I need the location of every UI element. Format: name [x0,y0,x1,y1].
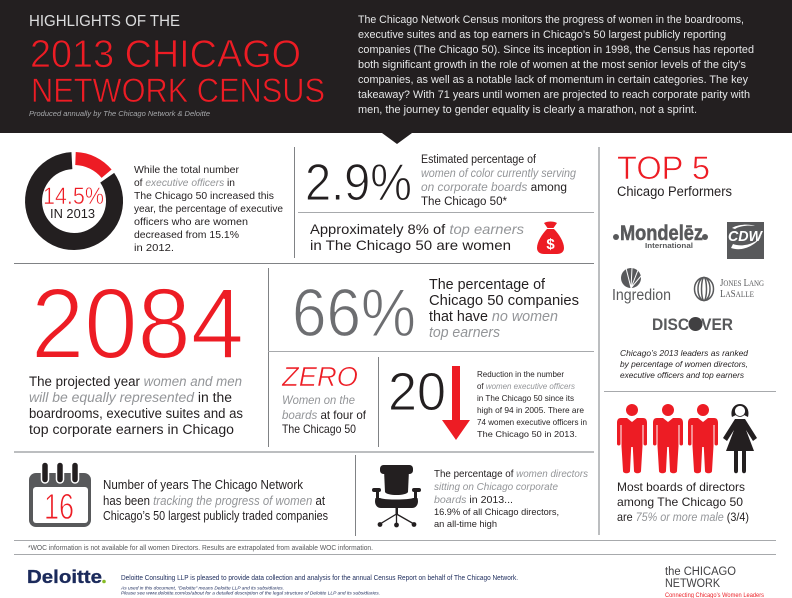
panel: 2.9 percent women of color [305,154,577,212]
title: Produced annually by The Chicago Network & Deloitte [29,109,210,118]
text block: While the total number [134,164,239,176]
logo: Deloitte: Deloitte [27,566,102,587]
logo: Jones Lang LaSalle: JONES LANG [720,278,764,289]
panel: 2.9 percent women of color: on corporate boards among [421,182,567,194]
panel: zero women on boards [281,361,367,436]
caption: Chicago’s 2013 leaders as ranked [620,348,748,358]
text block: of executive officers in [134,177,235,189]
panel: reduction of 20 [388,362,587,440]
panel: top earners: Approximately 8% of top earners [310,221,524,237]
panel: top earners [310,221,564,254]
panel: zero women on boards: The Chicago 50 [282,422,356,436]
intro paragraph: both significant growth in the role of women at the most senior levels of the city’s [358,59,746,71]
intro paragraph: companies, as well as a notable lack of momentum in certain categories. The key [358,74,748,86]
panel: 2084: 2084 [31,268,244,380]
panel: 66 percent: top earners [429,324,500,341]
panel: zero women on boards: ZERO [281,361,358,392]
panel: 66 percent: that have no women [429,308,558,325]
logo: The Chicago Network [665,566,764,598]
panel: reduction of 20: The Chicago 50 in 2013. [477,429,577,439]
intro paragraph [358,14,754,116]
donut chart [34,158,115,242]
panel: top 5 performers [612,150,764,380]
panel: 66 percent: Chicago 50 companies [429,292,579,309]
panel: reduction of 20: of women executive officers [477,381,576,391]
panel: women directors: an all-time high [434,519,497,530]
panel: executive officers donut [34,158,283,254]
panel: years tracking: Number of years The Chicago Network [103,478,304,492]
text block: year, the percentage of executive [134,203,283,215]
panel: zero women on boards: boards at four of [282,408,367,422]
panel: 2.9 percent women of color: 2.9% [305,154,412,212]
title: NETWORK CENSUS [31,72,325,110]
panel: reduction of 20: in The Chicago 50 since its [477,393,574,403]
icon: three men, one woman [617,404,757,473]
panel: reduction of 20: high of 94 in 2005. There are [477,405,584,415]
panel: reduction of 20: 20 [388,362,446,422]
panel: 2.9 percent women of color: women of color currently serving [421,168,577,180]
panel: boards male ratio: Most boards of directors [617,480,745,494]
panel: top earners: in The Chicago 50 are women [310,237,511,253]
panel: 2084: boardrooms, executive suites and as [29,406,243,421]
panel: years tracking: Chicago’s 50 largest publicly traded companies [103,509,328,523]
icon: office chair [372,465,421,527]
arrow: down [442,366,470,440]
text block: The Chicago 50 increased this [134,190,274,202]
intro paragraph: companies (The Chicago 50). Since its inception in 1998, the Census has reported [358,44,754,56]
footer: Deloitte: As used in this document, "Deloitte" means Deloitte LLP and its subsidiaries. [120,586,284,590]
title: 2013 CHICAGO [30,33,301,76]
intro paragraph: The Chicago Network Census monitors the progress of women in the boardrooms, [358,14,744,26]
panel: reduction of 20: Reduction in the number [477,369,564,379]
panel: reduction of 20: 74 women executive officers in [477,417,587,427]
icon: calendar [29,462,91,527]
intro paragraph: men, the journey to gender equality is clearly a marathon, not a sprint. [358,104,697,116]
logo: Jones Lang LaSalle: LASALLE [720,289,754,300]
panel: 2084: top corporate earners in Chicago [29,422,234,437]
logo: Mondelez: International [645,241,693,250]
panel: women directors: sitting on Chicago corporate [434,482,558,493]
panel: 2.9 percent women of color: Estimated percentage of [421,154,537,166]
logo: CDW: CDW [728,228,764,245]
logo: Discover: DISCOVER [652,316,733,334]
panel: zero women on boards: Women on the [282,393,355,407]
intro paragraph: takeaway? With 71 years until women are projected to reach corporate parity with [358,89,750,101]
logo: Ingredion: Ingredion [612,287,671,304]
panel: women directors [372,465,588,530]
panel: years tracking [29,462,328,527]
icon: money bag: $ [546,236,555,253]
footer: Deloitte: Deloitte Consulting LLP is pleased to provide data collection and analysis for the annual Census Report on behalf of The Chicago Network. [121,575,518,582]
footer: Deloitte [27,566,518,596]
panel: boards male ratio: among The Chicago 50 [617,495,743,509]
icon: calendar: 16 [44,486,74,527]
logo: Mondelez: Mondelēz [620,222,703,245]
panel: women directors: 16.9% of all Chicago directors, [434,507,559,518]
panel: years tracking: has been tracking the progress of women at [103,494,325,508]
panel: 2.9 percent women of color: The Chicago 50* [421,196,508,208]
panel: 2084 [29,268,244,437]
text block: in 2012. [134,242,174,254]
header banner [0,0,792,144]
panel: top 5 performers: TOP 5 [617,150,710,186]
text block: decreased from 15.1% [134,229,239,241]
panel: 2084: will be equally represented in the [29,390,232,405]
panel: 66 percent: The percentage of [429,276,546,293]
donut chart: IN 2013 [50,207,95,221]
panel: 66 percent [292,275,579,351]
title: HIGHLIGHTS OF THE [29,13,180,30]
logo: Ingredion [612,268,671,304]
text block: officers who are women [134,216,248,228]
logo: Jones Lang LaSalle [694,278,764,300]
panel: women directors: The percentage of women directors [434,469,588,480]
text block [134,164,283,254]
logo: CDW [727,222,764,259]
panel: 66 percent: 66% [292,275,416,351]
panel: boards male ratio: are 75% or more male (3/4) [617,510,749,524]
footnote: *WOC information is not available for all women Directors. Results are extrapolated from available WOC information. [28,545,373,552]
caption: executive officers and top earners [620,370,745,380]
footer: Deloitte: Please see www.deloitte.com/us/about for a detailed description of the legal structure of Deloitte LLP and its subsidiaries. [121,590,380,596]
title [29,13,325,118]
logo: The Chicago Network: NETWORK [665,578,720,590]
icon: money bag [537,222,564,254]
caption [620,348,748,380]
panel: boards male ratio [617,404,757,524]
panel: 2084: The projected year women and men [29,374,242,389]
panel: top 5 performers: Chicago Performers [617,184,732,199]
donut chart: 14.5% [43,183,104,210]
intro paragraph: executive suites and as top earners in Chicago’s 50 largest publicly reporting [358,29,726,41]
logo: The Chicago Network: the CHICAGO [665,566,736,578]
panel: women directors: boards in 2013... [434,495,513,506]
caption: by percentage of women directors, [620,359,748,369]
